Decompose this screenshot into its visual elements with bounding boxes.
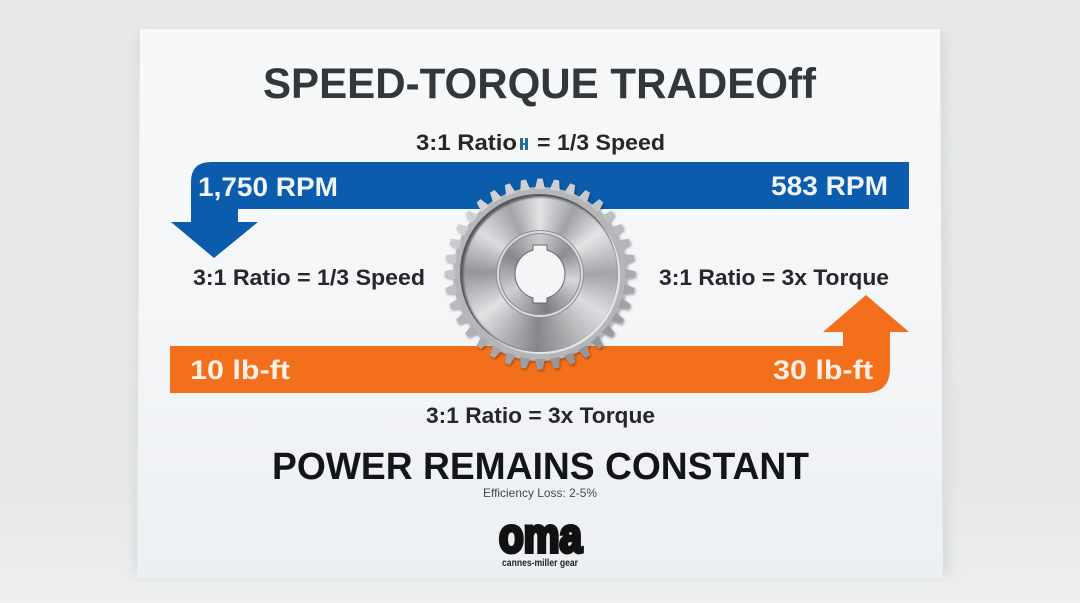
arrow: orange torque arrow	[170, 295, 909, 393]
label: input speed: 1,750 RPM	[198, 172, 338, 202]
label: left ratio: 3:1 Ratio = 1/3 Speed	[193, 265, 425, 290]
logo: cannes-miller gear: oma	[499, 510, 582, 563]
panel: board shadow	[134, 32, 950, 575]
label: input torque: 10 lb-ft	[190, 355, 290, 385]
label: right ratio: 3:1 Ratio = 3x Torque	[659, 265, 889, 290]
top ratio label with small icon	[416, 130, 665, 155]
icon: steel gear	[444, 178, 638, 372]
top ratio label with small icon: = 1/3 Speed	[537, 130, 665, 155]
panel: white board	[137, 29, 943, 578]
label: output torque: 30 lb-ft	[773, 355, 873, 385]
top ratio label with small icon: 3:1 Ratio	[416, 130, 517, 155]
logo: cannes-miller gear: cannes-miller gear	[502, 558, 578, 569]
arrow: blue speed arrow	[171, 162, 909, 258]
note: efficiency loss: Efficiency Loss: 2-5%	[483, 486, 597, 500]
label: output speed: 583 RPM	[771, 171, 888, 201]
heading: power remains constant: POWER REMAINS CONSTANT	[272, 446, 809, 488]
title: SPEED-TORQUE TRADEOff	[263, 60, 817, 108]
label: bottom ratio: 3:1 Ratio = 3x Torque	[426, 403, 655, 428]
